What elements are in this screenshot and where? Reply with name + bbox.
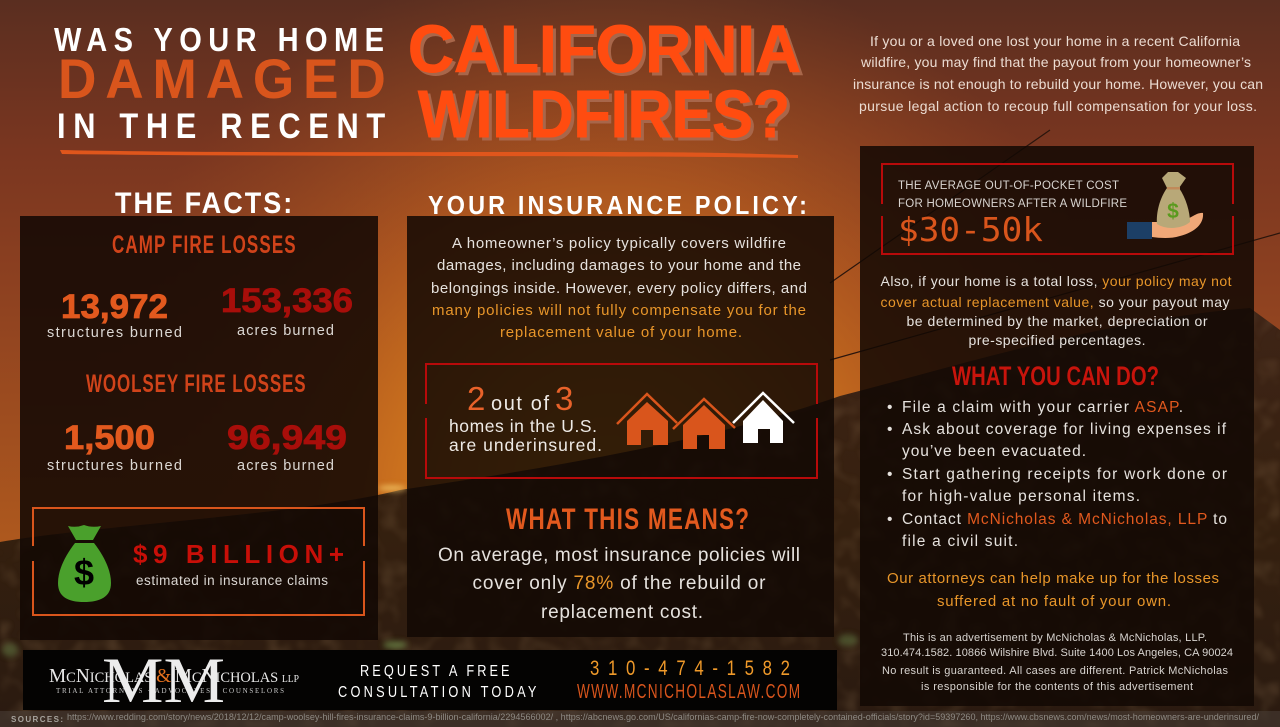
title underline brush stroke [60,150,798,158]
title: california wildfires: CALIFORNIA [411,15,804,90]
intro paragraph: If you or a loved one lost your home in a recent California [870,33,1240,49]
heading: camp fire losses: CAMP FIRE LOSSES [112,231,296,259]
callout: 2 out of 3 underinsured [426,364,817,478]
callout: out of pocket cost [882,164,1233,254]
list: what you can do: • [887,466,892,483]
logo: McNicholas & McNicholas [49,645,299,717]
text: advertisement disclaimer: 310.474.1582. 10866 Wilshire Blvd. Suite 1400 Los Angeles, CA 90024 [881,647,1233,659]
list: what you can do: Start gathering receipts for work done or [902,466,1227,483]
title: was your home damaged in the recent: IN THE RECENT [57,106,385,145]
list: what you can do: Ask about coverage for living expenses if [902,421,1227,438]
text: what this means body [438,545,800,623]
icon: green money bag: $ [74,552,94,593]
stat: 153,336 acres burned: acres burned [237,323,334,339]
title: was your home damaged in the recent: DAMAGED [58,48,386,110]
list: what you can do: File a claim with your carrier ASAP. [902,399,1183,416]
footer contact bar [23,645,837,717]
text: total loss paragraph: pre-specified percentages. [968,332,1146,348]
policy paragraph: damages, including damages to your home and the [437,257,801,274]
title: california wildfires: WILDFIRES? [421,80,793,155]
policy paragraph: A homeowner’s policy typically covers wildfire [452,235,786,252]
text: what this means body: On average, most insurance policies will [438,545,800,566]
list: what you can do: • [887,421,892,438]
text: advertisement disclaimer [881,632,1233,693]
stat: 153,336 acres burned [221,282,353,339]
text: phone and website: WWW.MCNICHOLASLAW.COM [577,680,800,703]
icon: three houses [617,393,794,449]
text: request a free consultation: CONSULTATION TODAY [338,684,537,701]
stat: 153,336 acres burned: 153,336 [221,282,353,320]
text: advertisement disclaimer: No result is guaranteed. All cases are different. Patrick McNicholas [882,665,1228,677]
logo: McNicholas & McNicholas: TRIAL ATTORNEYS · ADVOCATES · COUNSELORS [56,687,284,695]
text: our attorneys: Our attorneys can help make up for the losses [887,570,1219,587]
heading: what this means: WHAT THIS MEANS? [506,502,749,536]
stat: 13,972 structures burned: structures burned [47,325,182,341]
panel: right column [860,146,1254,706]
list: what you can do: you’ve been evacuated. [902,443,1086,460]
list: what you can do: for high-value personal items. [902,488,1140,505]
list: what you can do [887,399,1227,550]
callout: 2 out of 3 underinsured: out of [491,393,549,415]
text: what this means body: replacement cost. [541,602,703,623]
intro paragraph: wildfire, you may find that the payout from your homeowner’s [860,54,1251,70]
stat: 96,949 acres burned: 96,949 [227,419,347,457]
callout: out of pocket cost: THE AVERAGE OUT-OF-POCKET COST [898,180,1119,192]
icon: hand holding money bag [1127,172,1203,239]
intro paragraph [853,33,1263,114]
policy paragraph: many policies will not fully compensate you for the [432,302,806,319]
title: was your home damaged in the recent [54,21,386,145]
text: phone and website [577,657,800,703]
heading: the facts: THE FACTS: [115,187,292,220]
text: total loss paragraph: cover actual replacement value, so your payout may [880,294,1230,310]
text: total loss paragraph [880,273,1232,348]
title: california wildfires: CALIFORNIA [408,12,801,87]
intro paragraph: insurance is not enough to rebuild your home. However, you can [853,76,1263,92]
list: what you can do: • [887,511,892,528]
stat: 96,949 acres burned [227,419,347,474]
list: what you can do: • [887,399,892,416]
title: california wildfires [408,12,804,155]
heading: woolsey fire losses: WOOLSEY FIRE LOSSES [86,370,306,398]
callout: 9 billion in claims: $9 BILLION+ [133,539,344,569]
policy paragraph [431,235,807,341]
callout: 2 out of 3 underinsured: are underinsured. [449,435,602,455]
intro paragraph: pursue legal action to recoup full compensation for your loss. [859,98,1257,114]
callout: out of pocket cost: $30-50k [898,210,1043,249]
callout: 2 out of 3 underinsured: 3 [555,380,573,417]
panel: the facts [20,187,378,640]
title: was your home damaged in the recent: WAS YOUR HOME [54,21,384,58]
heading: what you can do: WHAT YOU CAN DO? [952,361,1159,392]
stat: 96,949 acres burned: acres burned [237,458,334,474]
text: our attorneys: suffered at no fault of your own. [937,593,1171,610]
policy paragraph: replacement value of your home. [500,324,742,341]
text: request a free consultation: REQUEST A FREE [360,663,510,680]
list: what you can do: Contact McNicholas & McNicholas, LLP to [902,511,1227,528]
callout: out of pocket cost: FOR HOMEOWNERS AFTER A WILDFIRE [898,198,1127,210]
callout: 2 out of 3 underinsured: 2 [467,380,485,417]
stat: 13,972 structures burned: 13,972 [61,288,168,326]
title: california wildfires: WILDFIRES? [418,77,790,152]
callout: 9 billion in claims: estimated in insurance claims [136,573,328,588]
stat: 1,500 structures burned: 1,500 [64,419,155,457]
text: total loss paragraph: be determined by the market, depreciation or [906,313,1208,329]
text: what this means body: cover only 78% of the rebuild or [472,573,766,594]
text: advertisement disclaimer: This is an advertisement by McNicholas & McNicholas, LLP. [903,632,1207,644]
stat: 1,500 structures burned: structures burned [47,458,182,474]
policy paragraph: belongings inside. However, every policy differs, and [431,280,807,297]
panel: your insurance policy [407,192,834,637]
stat: 13,972 structures burned [47,288,182,341]
heading: your insurance policy: YOUR INSURANCE POLICY: [428,192,807,220]
sources bar: SOURCES: [11,715,63,724]
stat: 1,500 structures burned [47,419,182,474]
text: phone and website: 310-474-1582 [590,657,790,681]
icon: hand holding money bag: $ [1167,200,1179,223]
logo: McNicholas & McNicholas: MM [102,645,225,717]
callout: 9 billion in claims [33,508,364,615]
sources bar [0,711,1280,727]
text: advertisement disclaimer: is responsible for the contents of this advertisement [921,681,1193,693]
text: total loss paragraph: Also, if your home is a total loss, your policy may not [880,273,1232,289]
logo: McNicholas & McNicholas: MCNICHOLAS & MCNICHOLAS LLP [49,665,299,687]
text: our attorneys [887,570,1219,610]
icon: green money bag [58,525,111,602]
list: what you can do: file a civil suit. [902,533,1018,550]
text: request a free consultation [338,663,537,701]
callout: 2 out of 3 underinsured: homes in the U.S. [449,416,597,436]
